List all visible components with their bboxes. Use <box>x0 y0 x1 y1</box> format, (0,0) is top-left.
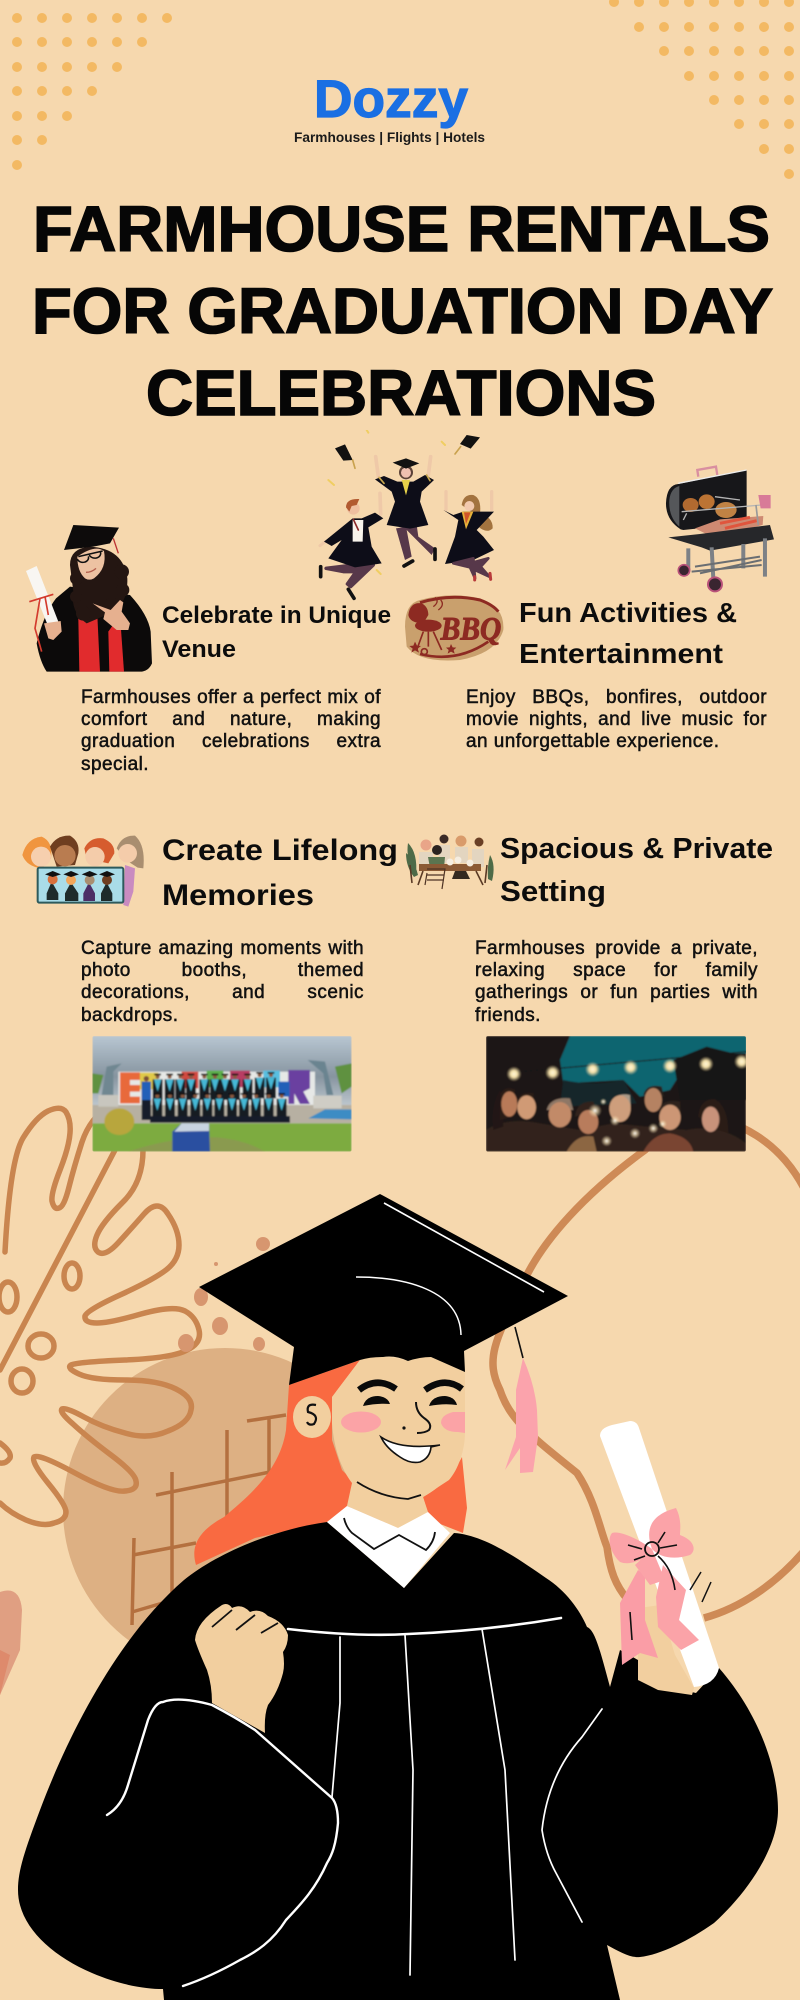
body text <box>475 938 758 1026</box>
body text: relaxing space for family <box>475 960 758 981</box>
chin line <box>357 1482 421 1499</box>
heading: Entertainment <box>519 638 723 669</box>
heading <box>162 834 398 912</box>
body text: Capture amazing moments with <box>81 938 364 959</box>
panel: spacious and private setting <box>406 833 773 1152</box>
logo <box>294 70 485 145</box>
body text: photo booths, themed <box>81 960 364 981</box>
pink shape left edge <box>0 1590 22 1695</box>
heading <box>519 597 737 669</box>
panel: fun activities and entertainment <box>405 465 774 752</box>
body text <box>81 938 364 1026</box>
body text: Farmhouses offer a perfect mix of <box>81 687 381 708</box>
right hand <box>625 1605 694 1695</box>
speckle dots <box>178 1237 270 1352</box>
heading: Spacious & Private <box>500 833 773 865</box>
icon: graduate woman with diploma <box>26 525 152 672</box>
body text: gatherings or fun parties with <box>475 982 758 1003</box>
body text: Farmhouses provide a private, <box>475 938 758 959</box>
blush cheeks <box>341 1412 465 1433</box>
collar <box>327 1506 450 1588</box>
body text <box>466 687 767 752</box>
body text: comfort and nature, making <box>81 709 381 730</box>
logo tagline: Farmhouses | Flights | Hotels <box>294 130 485 145</box>
tan circle behind figure <box>63 1348 387 1672</box>
body text <box>81 687 381 775</box>
dot pattern top right <box>609 0 794 179</box>
body text: Enjoy BBQs, bonfires, outdoor <box>466 687 767 708</box>
title: CELEBRATIONS <box>146 357 656 429</box>
window grid lines <box>132 1415 286 1625</box>
nose <box>402 1402 430 1433</box>
ribbon and bow <box>610 1508 711 1665</box>
heading: Celebrate in Unique <box>162 602 391 629</box>
heading: Create Lifelong <box>162 834 398 867</box>
panel: celebrate in unique venue <box>26 525 391 775</box>
tassel <box>505 1327 538 1473</box>
body text: friends. <box>475 1005 541 1026</box>
eyes <box>363 1396 457 1406</box>
icon: children holding photo board <box>22 836 144 907</box>
icon: BBQ badge <box>405 595 503 661</box>
title: FOR GRADUATION DAY <box>32 275 773 347</box>
face and neck <box>293 1357 465 1528</box>
body text: backdrops. <box>81 1005 178 1026</box>
mortarboard cap <box>199 1194 568 1385</box>
diploma scroll <box>600 1421 719 1687</box>
photo: graduating class group <box>92 1036 352 1152</box>
body text: decorations, and scenic <box>81 982 364 1003</box>
hair <box>194 1360 467 1565</box>
dot pattern top left <box>12 13 172 170</box>
photo: friends with sparklers at night <box>486 1036 749 1152</box>
body text: graduation celebrations extra <box>81 731 381 752</box>
gown white seams <box>107 1618 602 1986</box>
illustration: jumping graduates <box>318 430 494 600</box>
icon: barbecue grill <box>666 467 774 591</box>
heading <box>162 602 391 663</box>
logo wordmark: Dozzy <box>314 70 469 129</box>
body text: an unforgettable experience. <box>466 731 719 752</box>
heading: Venue <box>162 636 236 663</box>
heading: Memories <box>162 879 314 912</box>
eyebrows <box>359 1383 462 1390</box>
heading: Fun Activities & <box>519 597 737 628</box>
heading: Setting <box>500 876 606 908</box>
body text: movie nights, and live music for <box>466 709 767 730</box>
large looping line right <box>493 1118 800 1618</box>
panel: create lifelong memories <box>22 834 398 1152</box>
title: FARMHOUSE RENTALS <box>33 195 770 265</box>
gown <box>18 1522 778 2000</box>
body text: special. <box>81 754 149 775</box>
raised fist <box>195 1604 288 1733</box>
icon: friends dining at table <box>406 834 494 889</box>
title <box>32 195 774 429</box>
heading <box>500 833 773 908</box>
leaf line art <box>0 1105 200 1524</box>
icon: BBQ badge: BBQ <box>440 611 501 647</box>
smile <box>381 1437 440 1462</box>
ear detail <box>307 1405 316 1425</box>
